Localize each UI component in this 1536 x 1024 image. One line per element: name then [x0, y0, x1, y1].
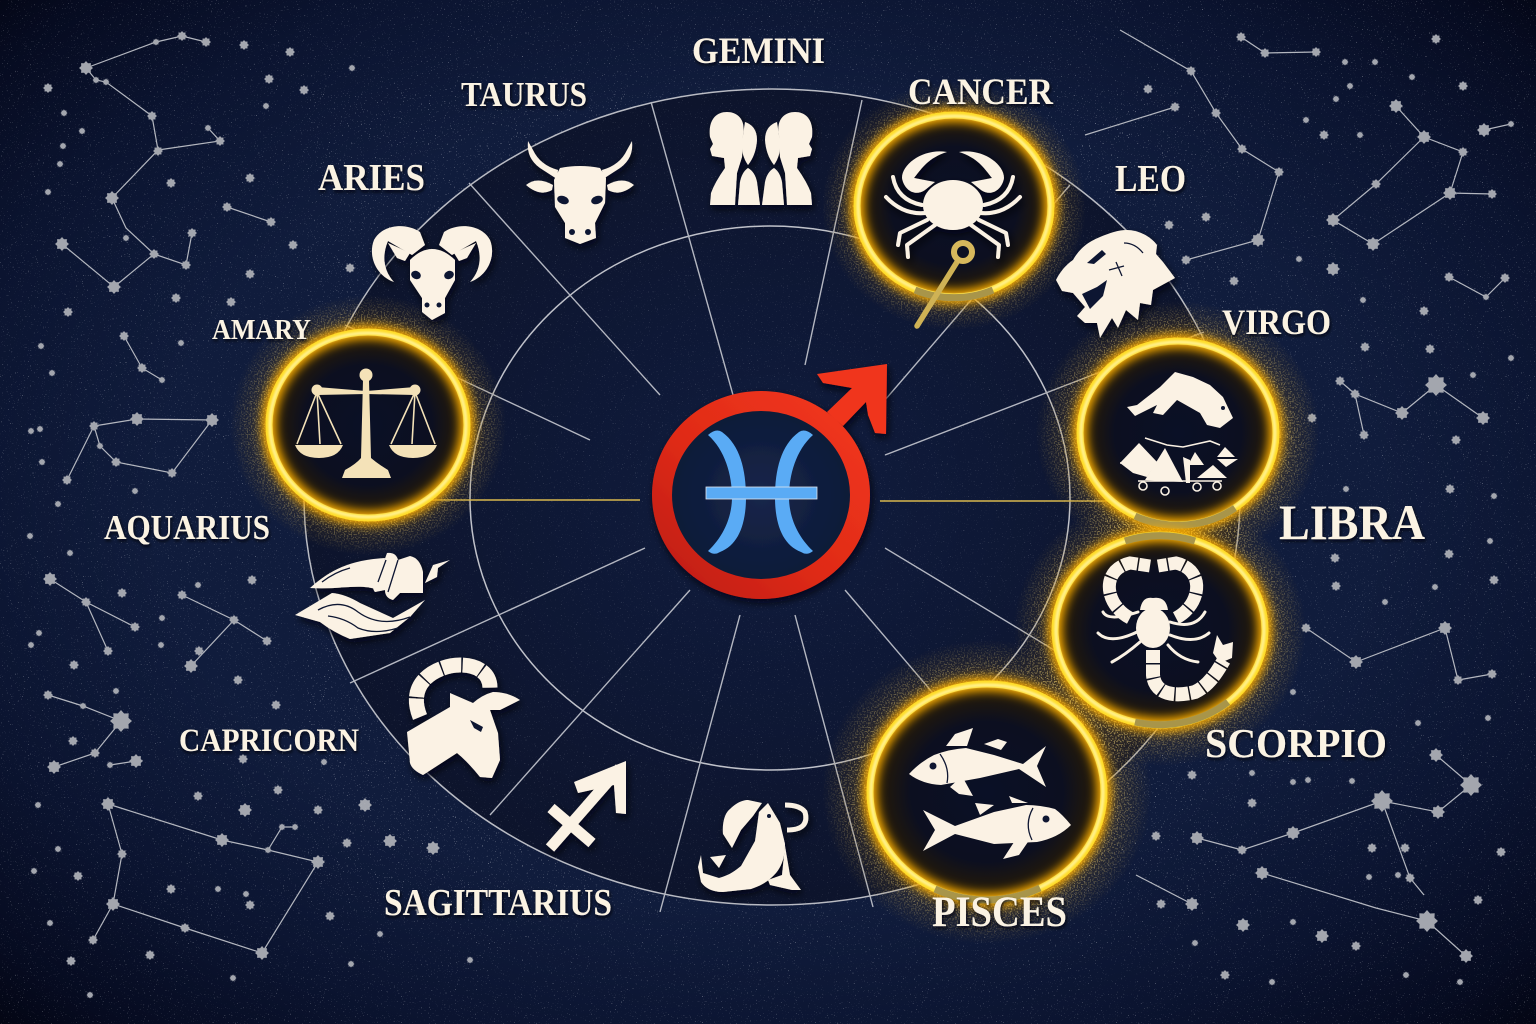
label: cancer: CANCER [908, 72, 1054, 113]
icon: pisces fish [909, 728, 1071, 859]
gold haze around rings [230, 82, 1320, 944]
label: pisces: PISCES [932, 889, 1067, 936]
label: sagittarius: SAGITTARIUS [384, 882, 612, 924]
label: virgo: VIRGO [1222, 302, 1331, 342]
label: taurus: TAURUS [461, 75, 587, 114]
labels [104, 31, 1425, 936]
icon: capricorn goat [407, 665, 520, 778]
label: aquarius: AQUARIUS [104, 508, 270, 547]
label: leo: LEO [1115, 158, 1186, 200]
icon: gemini twins [710, 112, 812, 205]
ring: cancer [857, 115, 1051, 298]
inner ring [470, 226, 1070, 770]
icon: aquarius waves [295, 553, 450, 639]
label: libra: LIBRA [1279, 494, 1425, 550]
icon: pisces glyph [706, 431, 817, 554]
icon: leo lion [1056, 230, 1175, 338]
zodiac wheel [304, 89, 1245, 912]
spokes [304, 100, 1245, 912]
icon: sea creature [698, 800, 806, 892]
icon: aries ram [372, 226, 492, 320]
ring: scorpio [1055, 535, 1265, 725]
icon: taurus bull [526, 141, 634, 244]
icon: libra scales [295, 368, 437, 478]
wheel star dust [306, 91, 1238, 903]
icon: sagittarius arrow [550, 761, 626, 848]
center hub [662, 364, 887, 589]
label: aries: ARIES [318, 157, 425, 199]
icon: cancer crab [886, 151, 1020, 257]
icon: scorpio scorpion [1098, 563, 1233, 694]
wheel disc [304, 89, 1240, 905]
label: capricorn: CAPRICORN [179, 723, 359, 759]
ring: virgo [1080, 341, 1276, 525]
label: scorpio: SCORPIO [1205, 720, 1387, 766]
label: gemini: GEMINI [692, 31, 825, 72]
label: amary: AMARY [212, 315, 311, 346]
ring: pisces [870, 684, 1104, 900]
icon: virgo animal and tents [1120, 372, 1238, 495]
ring: libra scale [269, 332, 467, 518]
icon: gold key needle [917, 243, 972, 326]
icon: mars symbol [662, 364, 887, 589]
